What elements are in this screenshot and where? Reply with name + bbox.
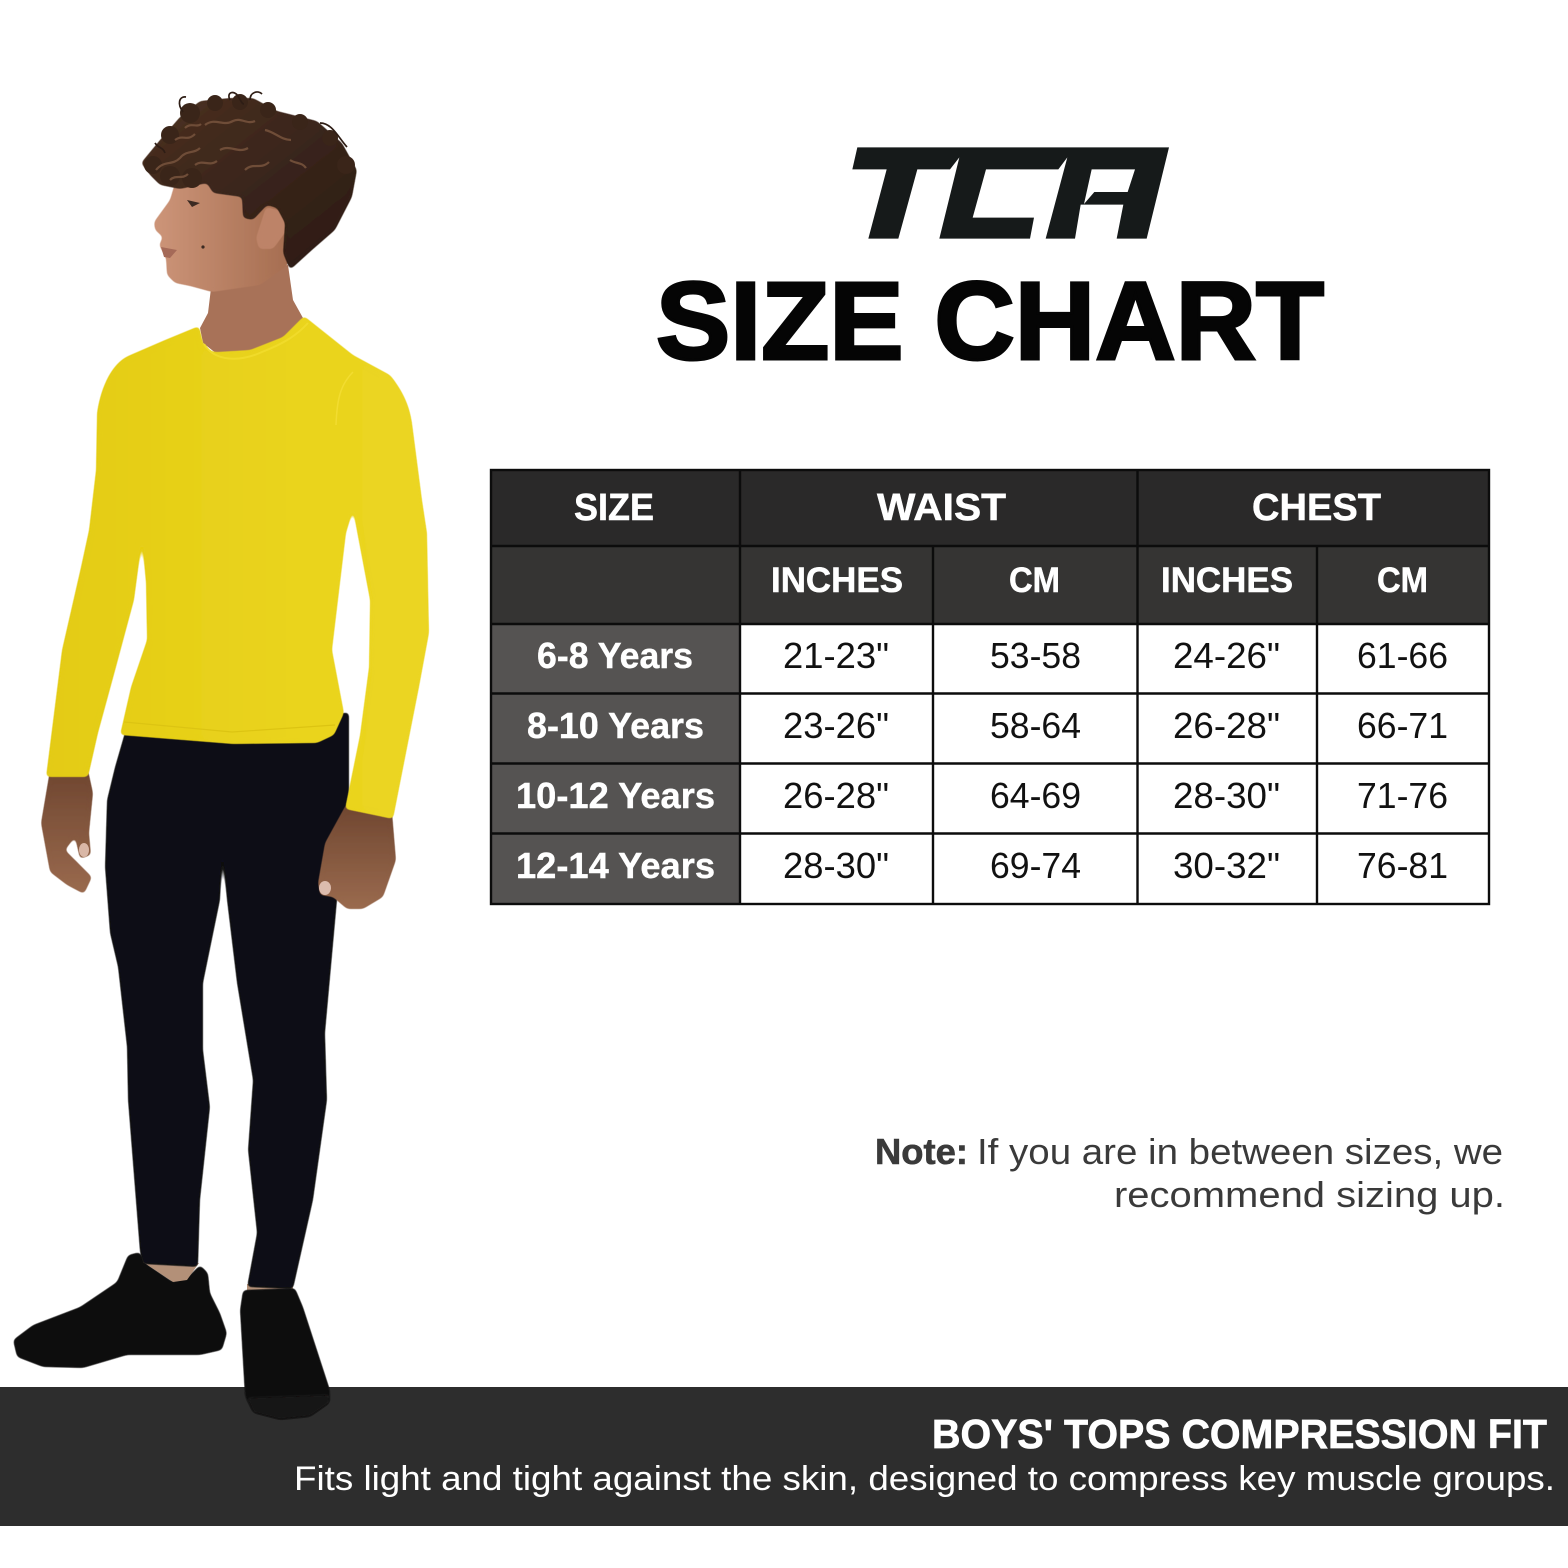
- curly hair: [141, 92, 357, 270]
- row: 6-8 years: 53-58: [990, 635, 1081, 676]
- left hand: [41, 770, 93, 894]
- row: 6-8 years: 24-26": [1173, 635, 1280, 676]
- header labels: CM: [1377, 561, 1428, 600]
- row: 10-12 years: 64-69: [990, 775, 1081, 816]
- row: 10-12 years: [516, 775, 1448, 816]
- bottom banner: [0, 1387, 1568, 1526]
- row: 8-10 years: 8-10 Years: [527, 705, 704, 746]
- size chart table: [490, 469, 1490, 905]
- size column fill: [490, 624, 740, 905]
- TCA logo: [852, 147, 1169, 239]
- face: [154, 180, 290, 292]
- row: 8-10 years: 23-26": [783, 705, 889, 746]
- header row fill: [490, 469, 1490, 546]
- title: SIZE CHART: [656, 260, 1324, 383]
- row: 6-8 years: 61-66: [1357, 635, 1448, 676]
- header labels: INCHES: [771, 561, 903, 600]
- mole: [201, 245, 205, 249]
- row: 6-8 years: 6-8 Years: [537, 635, 693, 676]
- sizing note: [875, 1131, 1505, 1215]
- row: 10-12 years: 26-28": [783, 775, 889, 816]
- row: 12-14 years: 28-30": [783, 845, 889, 886]
- subheader row fill: [490, 546, 1490, 624]
- banner heading: BOYS' TOPS COMPRESSION FIT: [932, 1411, 1547, 1457]
- row: 6-8 years: 21-23": [783, 635, 889, 676]
- eye: [187, 200, 200, 207]
- lips: [161, 247, 177, 258]
- row: 12-14 years: 76-81: [1357, 845, 1448, 886]
- header labels: [574, 487, 1428, 600]
- header labels: INCHES: [1161, 561, 1293, 600]
- sizing note: Note:: [875, 1131, 968, 1172]
- row: 10-12 years: 28-30": [1173, 775, 1280, 816]
- right hand: [318, 803, 396, 909]
- sizing note: If you are in between sizes, we: [977, 1131, 1503, 1172]
- banner description: Fits light and tight against the skin, designed to compress key muscle groups.: [294, 1460, 1555, 1498]
- row: 8-10 years: 66-71: [1357, 705, 1448, 746]
- row: 8-10 years: 58-64: [990, 705, 1081, 746]
- row: 10-12 years: 10-12 Years: [516, 775, 715, 816]
- neck: [200, 265, 303, 354]
- row: 12-14 years: 69-74: [990, 845, 1081, 886]
- row: 12-14 years: [516, 845, 1448, 886]
- header labels: CM: [1009, 561, 1060, 600]
- row: 12-14 years: 30-32": [1173, 845, 1280, 886]
- left shoe: [13, 1252, 227, 1368]
- ear: [256, 207, 287, 249]
- table grid: [491, 470, 1489, 904]
- row: 12-14 years: 12-14 Years: [516, 845, 715, 886]
- row: 6-8 years: [537, 635, 1448, 676]
- header labels: SIZE: [574, 487, 654, 529]
- yellow long sleeve shirt: [46, 316, 429, 819]
- black leggings: [105, 712, 349, 1289]
- header labels: CHEST: [1252, 487, 1381, 529]
- sizing note: recommend sizing up.: [1114, 1174, 1505, 1215]
- right shoe: [240, 1284, 330, 1420]
- row: 10-12 years: 71-76: [1357, 775, 1448, 816]
- header labels: WAIST: [877, 487, 1006, 529]
- row: 8-10 years: 26-28": [1173, 705, 1280, 746]
- model figure: [13, 92, 429, 1420]
- row: 8-10 years: [527, 705, 1448, 746]
